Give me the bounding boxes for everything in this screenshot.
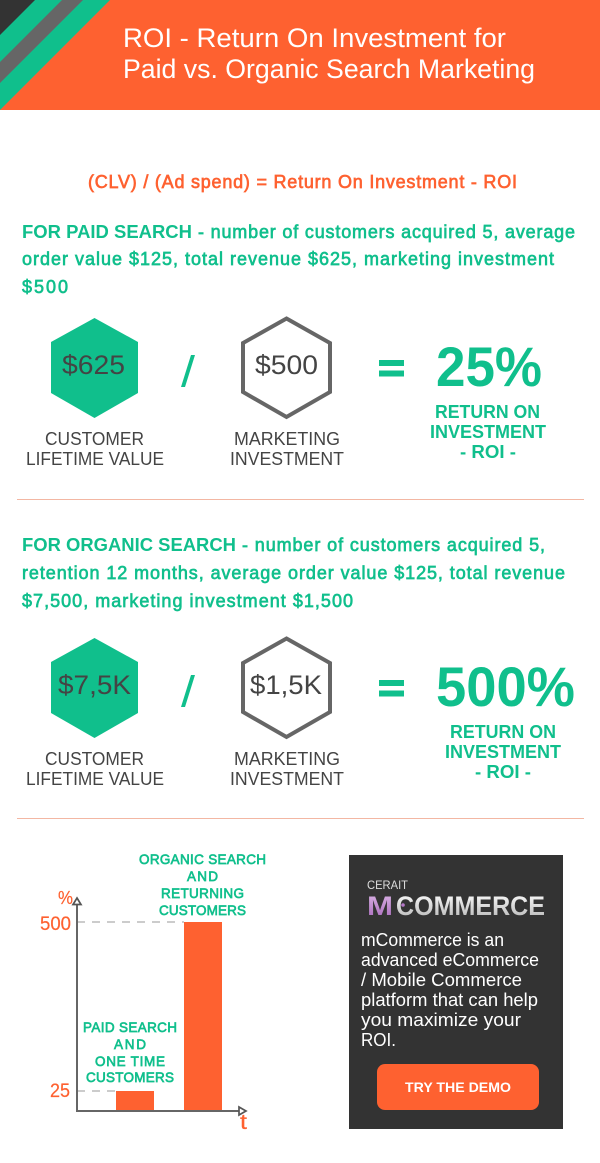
organic search description: - number of customers acquired 5, [242,535,545,555]
formula: (CLV) / (Ad spend) = Return On Investment - ROI [88,172,517,192]
label: paid search and one time customers: AND [114,1037,146,1052]
hexagon: customer lifetime value 7,5K: $7,5K [58,670,131,700]
label: paid search and one time customers [83,1020,177,1085]
hexagon: marketing investment 1,5K [243,638,330,737]
hexagon: customer lifetime value 7,5K [51,638,138,738]
label: marketing investment [230,749,344,789]
label: marketing investment: INVESTMENT [230,769,344,789]
hexagon: customer lifetime value 625: $625 [62,350,125,380]
bar chart [40,852,266,1134]
title: ROI - Return On Investment for [123,23,506,53]
label: customer lifetime value: LIFETIME VALUE [26,769,164,789]
paid search description: FOR PAID SEARCH [22,222,192,242]
header banner [0,0,600,110]
label: marketing investment: MARKETING [234,429,340,449]
axis labels [40,888,247,1134]
bar: paid search [116,1091,154,1111]
button: try the demo [377,1064,539,1110]
label: customer lifetime value: CUSTOMER [45,429,144,449]
label: paid search and one time customers: ONE TIME [95,1054,165,1069]
hexagon: marketing investment 500: $500 [255,350,318,380]
organic search description: FOR ORGANIC SEARCH [22,535,236,555]
label: organic search and returning customers: ORGANIC SEARCH [139,852,266,867]
return on investment label: INVESTMENT [445,742,561,762]
organic search description: $7,500, marketing investment $1,500 [22,591,353,611]
label: organic search and returning customers: CUSTOMERS [159,903,246,918]
axis labels: 25 [50,1080,70,1102]
return on investment label: INVESTMENT [430,422,546,442]
panel: mCommerce promo [349,855,563,1129]
axis labels: 500 [40,913,71,935]
paid search description: $500 [22,277,68,297]
logo: Cerait mCommerce: CERAIT [367,880,408,892]
return on investment label: - ROI - [460,442,516,462]
label: organic search and returning customers [139,852,266,918]
axes [73,898,246,1115]
label: customer lifetime value: CUSTOMER [45,749,144,769]
label: customer lifetime value: LIFETIME VALUE [26,449,164,469]
axis labels: t [240,1111,247,1134]
label: customer lifetime value [26,429,164,469]
hexagon: customer lifetime value 625 [51,318,138,418]
label: marketing investment [230,429,344,469]
division slash [181,675,195,707]
label: organic search and returning customers: AND [187,869,218,884]
label: organic search and returning customers: RETURNING [161,886,244,901]
paid search description: - number of customers acquired 5, average [198,222,575,242]
promo text [361,930,539,1050]
division slash [181,355,195,387]
label: customer lifetime value [26,749,164,789]
label: paid search and one time customers: CUSTOMERS [86,1070,174,1085]
axis labels: % [58,888,73,908]
bar: organic search [184,922,222,1111]
promo text: you maximize your [361,1010,521,1030]
return on investment label [430,402,546,462]
label: paid search and one time customers: PAID SEARCH [83,1020,177,1035]
paid search description: order value $125, total revenue $625, marketing investment [22,249,554,269]
paid search description [22,222,575,297]
button: try the demo: TRY THE DEMO [405,1079,511,1095]
promo text: advanced eCommerce [361,950,539,970]
organic search description [22,535,565,611]
return on investment label: RETURN ON [450,722,556,742]
organic search description: retention 12 months, average order value $125, total revenue [22,563,565,583]
promo text: ROI. [361,1030,396,1050]
result 500 percent: 500% [436,655,575,718]
promo text: platform that can help [361,990,538,1010]
return on investment label: - ROI - [475,762,531,782]
logo: Cerait mCommerce: M [367,891,393,921]
label: marketing investment: MARKETING [234,749,340,769]
logo: Cerait mCommerce [367,880,545,921]
hexagon: marketing investment 500 [243,318,330,417]
promo text: mCommerce is an [361,930,504,950]
equals sign [379,360,404,376]
equals sign [379,680,404,696]
return on investment label [445,722,561,782]
return on investment label: RETURN ON [435,402,540,422]
title [123,23,535,84]
title: Paid vs. Organic Search Marketing [123,54,535,84]
label: marketing investment: INVESTMENT [230,449,344,469]
result 25 percent: 25% [436,335,542,398]
logo: Cerait mCommerce: COMMERCE [396,891,545,921]
promo text: / Mobile Commerce [361,970,522,990]
hexagon: marketing investment 1,5K: $1,5K [250,670,322,700]
